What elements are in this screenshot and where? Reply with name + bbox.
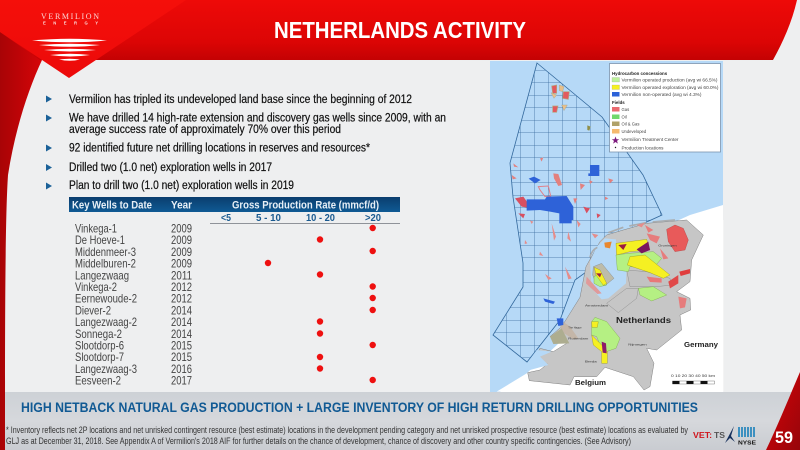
city labels: Nijmegen: [628, 342, 647, 346]
city labels: [568, 244, 677, 364]
footnote: GLJ as at December 31, 2018. See Appendix A of Vermilion's 2018 AIF for further details on the chance of development, chance of discovery and other country specific contingencies. (See Advisory): [6, 436, 631, 446]
well names and years: Langezwaag: [75, 268, 129, 282]
northern gas fields: [552, 85, 569, 112]
red header banner: [0, 0, 797, 60]
city labels: Breda: [585, 360, 598, 364]
well names and years: 2014: [171, 303, 192, 317]
well names and years: 2015: [171, 338, 192, 352]
map legend: Oil & Gas: [622, 122, 639, 126]
bullet 2: [46, 112, 446, 136]
non-operated blocks: [543, 298, 555, 304]
footnote: [6, 425, 688, 446]
well names and years: 2014: [171, 315, 192, 329]
bottom right red corner: [766, 372, 800, 450]
map legend: Vermilion operated production (avg wi 66.5%): [622, 78, 718, 82]
rate category headers: <5: [221, 212, 231, 224]
table header: Key Wells to Date: [72, 200, 152, 212]
well names and years: 2016: [171, 362, 192, 376]
map of Netherlands concessions: [490, 61, 723, 400]
rate category headers: 10 - 20: [306, 212, 335, 224]
city labels: The Hague: [568, 325, 582, 329]
map legend: Vermilion Treatment Center: [622, 137, 679, 142]
well names and years: Slootdorp-6: [75, 338, 124, 352]
bullet 2: We have drilled 14 high-rate extension and discovery gas wells since 2009, with an: [69, 112, 446, 124]
city labels: Groningen: [658, 244, 677, 248]
table header: [69, 197, 400, 212]
well names and years: 2011: [171, 268, 192, 282]
Germany and Belgium land: [650, 205, 723, 400]
well names and years: Vinkega-1: [75, 222, 117, 236]
offshore block grid: [493, 63, 662, 362]
bullet list: [46, 94, 446, 192]
Wadden islands: [590, 220, 675, 257]
map legend: Oil: [622, 114, 627, 120]
well names and years: 2009: [171, 257, 192, 271]
stock exchange logos: VET:: [693, 430, 712, 440]
logo: Vermilion Energy: VERMILION: [41, 12, 99, 21]
country labels: Netherlands: [616, 316, 672, 325]
production rate dots: [265, 225, 376, 383]
well names and years: De Hoeve-1: [75, 233, 125, 247]
Netherlands land: [528, 220, 703, 390]
stock exchange logos: TS: [714, 430, 725, 440]
bottom grey band: [5, 392, 800, 450]
green operated production: [616, 252, 662, 272]
map legend: [610, 64, 720, 152]
bullet 3: 92 identified future net drilling locations in reserves and resources*: [69, 142, 370, 154]
rate category headers: >20: [365, 212, 381, 224]
non-operated blocks: [588, 165, 599, 176]
country labels: Belgium: [575, 380, 606, 387]
well names and years: Middenmeer-3: [75, 245, 136, 259]
map scale bar: [671, 373, 716, 384]
city labels: Amsterdam: [585, 304, 610, 308]
well names and years: 2014: [171, 327, 192, 341]
well names and years: 2012: [171, 292, 192, 306]
well names and years: [75, 222, 192, 388]
well names and years: 2009: [171, 245, 192, 259]
bullet 2: average success rate of approximately 70% over this period: [69, 124, 341, 136]
stock exchange logos: NYSE: [738, 440, 756, 446]
rate category headers: [221, 212, 381, 224]
well names and years: Sonnega-2: [75, 327, 122, 341]
well names and years: 2015: [171, 350, 192, 364]
table: key wells to date: [69, 197, 400, 388]
well names and years: 2009: [171, 222, 192, 236]
well names and years: Vinkega-2: [75, 280, 117, 294]
logo: Vermilion Energy: ENERGY: [43, 20, 98, 26]
bullet 4: Drilled two (1.0 net) exploration wells in 2017: [69, 162, 272, 174]
country labels: Germany: [684, 342, 718, 349]
gas fields onshore: [667, 225, 688, 252]
bullet 5: Plan to drill two (1.0 net) exploration wells in 2019: [69, 180, 294, 192]
page number: 59: [775, 429, 793, 447]
map legend: Gas: [622, 107, 629, 112]
well names and years: Eernewoude-2: [75, 292, 137, 306]
map legend: Vermilion non-operated (avg wi 4.3%): [622, 92, 702, 97]
map legend: Vermilion operated exploration (avg wi 60.0%): [622, 85, 719, 90]
table header: Year: [171, 200, 193, 212]
key message: HIGH NETBACK NATURAL GAS PRODUCTION + LARGE INVENTORY OF HIGH RETURN DRILLING OPPORTUNITIES: [21, 400, 698, 415]
well names and years: Langezwaag-2: [75, 315, 137, 329]
yellow operated exploration: [616, 239, 650, 255]
logo: Vermilion Energy: [0, 0, 186, 78]
map legend: Fields: [612, 100, 625, 105]
well names and years: Slootdorp-7: [75, 350, 124, 364]
Flevoland and Noord-Holland polder: [593, 263, 614, 286]
table header: Gross Production Rate (mmcf/d): [232, 200, 379, 212]
city labels: Rotterdam: [568, 336, 590, 340]
left red edge strip: [0, 30, 42, 450]
well names and years: Eesveen-2: [75, 374, 121, 388]
rate category headers: 5 - 10: [256, 212, 281, 224]
map legend: Production locations: [622, 146, 664, 150]
title: NETHERLANDS ACTIVITY: [274, 17, 526, 43]
well names and years: 2009: [171, 233, 192, 247]
IJsselmeer and Wadden water: [590, 238, 627, 299]
gas fields offshore: [525, 220, 645, 280]
stock exchange logos: [693, 426, 756, 446]
well names and years: Langezwaag-3: [75, 362, 137, 376]
map legend: Hydrocarbon concessions: [612, 71, 668, 76]
well names and years: Middelburen-2: [75, 257, 136, 271]
country labels: [575, 316, 718, 387]
well names and years: Diever-2: [75, 303, 111, 317]
well names and years: 2012: [171, 280, 192, 294]
well names and years: 2017: [171, 374, 192, 388]
map legend: Undeveloped: [622, 129, 647, 134]
map scale bar: 0 10 20 30 40 50 km: [671, 373, 716, 378]
bullet 1: Vermilion has tripled its undeveloped land base since the beginning of 2012: [69, 94, 412, 106]
